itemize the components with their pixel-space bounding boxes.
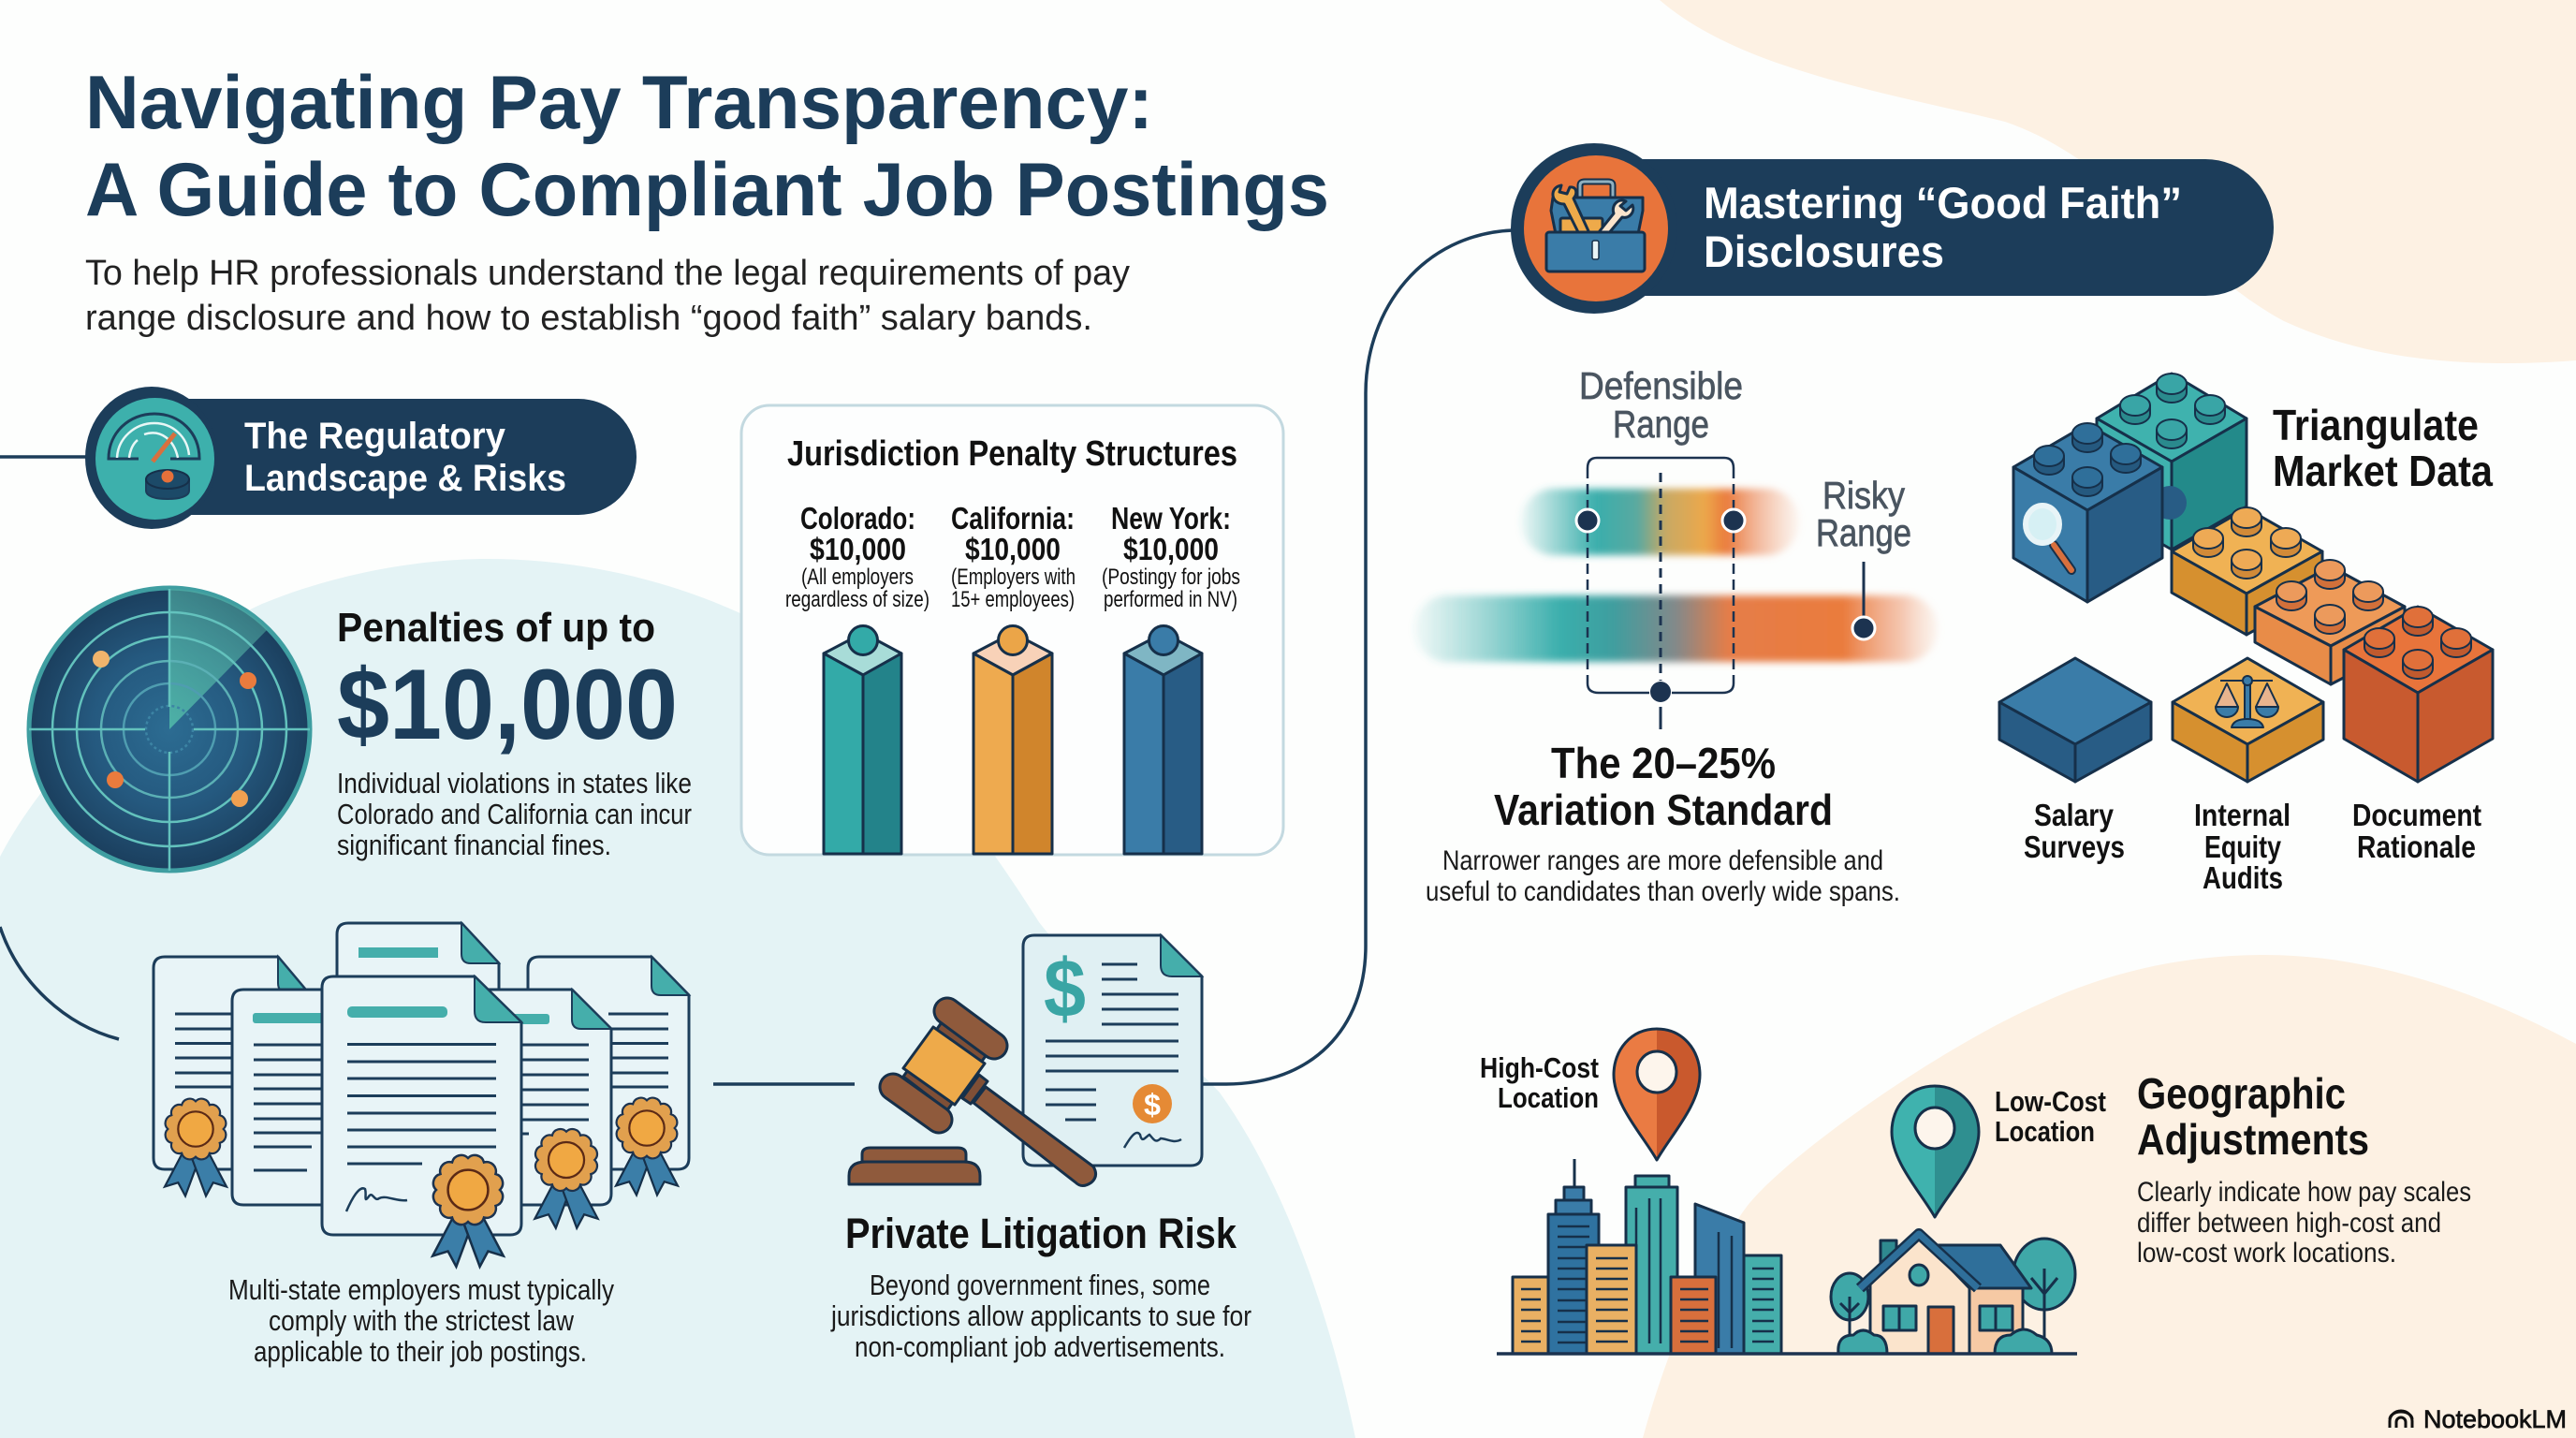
background blob: teal [0, 559, 1355, 1438]
text block: variation standard: Narrower ranges are more defensible and [1442, 845, 1883, 876]
column: Colorado [785, 501, 929, 612]
ground line [1497, 1352, 2077, 1356]
bar: New York [1124, 625, 1202, 854]
illustration: fined document: $ [1044, 942, 1086, 1034]
subtitle: To help HR professionals understand the legal requirements of pay [85, 254, 1130, 293]
middle left document [232, 990, 393, 1205]
middle right document [440, 990, 611, 1205]
title: Navigating Pay Transparency: [85, 61, 1153, 145]
icon: magnifier [2054, 545, 2071, 570]
top document [337, 923, 499, 1030]
stat: penalties of up to $10,000: Penalties of up to [337, 605, 655, 651]
illustration: fined document: $ [1144, 1088, 1161, 1122]
icon: gauge [109, 414, 199, 499]
caption: multi-state employers: Multi-state employers must typically [228, 1273, 614, 1306]
icon: scales [2216, 676, 2278, 727]
heading: triangulate market data [2273, 401, 2493, 495]
section header: good faith: Mastering “Good Faith” [1704, 178, 2182, 227]
illustration: building blocks [1999, 374, 2493, 782]
flat block: blue [1999, 658, 2151, 782]
tree: right [2013, 1239, 2075, 1348]
column: New York: $10,000 [1123, 532, 1219, 566]
subtitle: range disclosure and how to establish “good faith” salary bands. [85, 299, 1092, 338]
block: blue with magnifier [2013, 423, 2187, 602]
flat block: gold with scales [2173, 658, 2323, 782]
block: gold [2172, 507, 2322, 635]
text block: variation standard: The 20–25% [1551, 739, 1776, 787]
stat: penalties of up to $10,000: Individual violations in states like [337, 767, 692, 800]
back right document [528, 957, 689, 1169]
icon: toolbox [1546, 182, 1645, 271]
column: New York [1102, 501, 1240, 612]
front document [322, 976, 521, 1235]
section header: regulatory landscape: The Regulatory [244, 416, 506, 457]
block: red orange [2344, 607, 2493, 782]
label: risky range: Risky [1822, 474, 1905, 517]
section header: good faith: Disclosures [1704, 227, 1944, 276]
text block: variation standard: Variation Standard [1494, 785, 1833, 834]
text block: geographic adjustments: differ between high-cost and [2137, 1208, 2441, 1239]
text block: private litigation risk [830, 1210, 1251, 1363]
back left document [154, 957, 308, 1169]
text block: geographic adjustments: Adjustments [2137, 1115, 2369, 1164]
bar: California [973, 625, 1052, 854]
icon: radar [29, 588, 310, 871]
illustration: city [1513, 1159, 1781, 1354]
label: risky range [1816, 474, 1911, 554]
radar sweep [169, 589, 268, 729]
label: risky range: Range [1816, 511, 1911, 554]
seal: back left [165, 1099, 227, 1196]
column: Colorado: (All employers [801, 565, 914, 590]
section header: good faith [1511, 143, 2274, 314]
caption: multi-state employers: comply with the strictest law [269, 1304, 575, 1337]
text block: private litigation risk: Private Litigation Risk [845, 1210, 1237, 1257]
label: high-cost location [1480, 1051, 1599, 1114]
column: California [951, 501, 1076, 612]
section header: regulatory landscape [85, 387, 637, 529]
label: document rationale: Document [2352, 798, 2481, 832]
label: salary surveys: Surveys [2024, 829, 2125, 864]
heading: triangulate market data: Triangulate [2273, 401, 2479, 449]
title: A Guide to Compliant Job Postings [85, 148, 1329, 232]
stat: penalties of up to $10,000: Colorado and California can incur [337, 798, 692, 830]
section header: regulatory landscape: Landscape & Risks [244, 458, 566, 499]
wide range bar [1414, 595, 1938, 662]
column: Colorado: Colorado: [800, 501, 915, 536]
seal: back right [616, 1098, 678, 1195]
text block: geographic adjustments: low-cost work locations. [2137, 1238, 2396, 1269]
icon: orange location pin [1614, 1029, 1700, 1160]
stat: penalties of up to $10,000: $10,000 [337, 648, 678, 760]
gavel base [862, 1148, 966, 1162]
block: light orange [2255, 560, 2405, 684]
label: defensible range: Defensible [1579, 364, 1743, 407]
bar: Colorado [824, 625, 901, 854]
subtitle [85, 254, 1130, 338]
text block: variation standard: useful to candidates than overly wide spans. [1426, 876, 1900, 907]
stat: penalties of up to $10,000 [337, 605, 692, 861]
column: California: California: [951, 501, 1075, 536]
label: low-cost location [1995, 1085, 2106, 1148]
gavel head [903, 1022, 988, 1110]
text block: geographic adjustments: Geographic [2137, 1069, 2346, 1118]
label: salary surveys: Salary [2034, 798, 2115, 832]
text block: private litigation risk: non-compliant job advertisements. [855, 1330, 1225, 1363]
column: California: $10,000 [965, 532, 1061, 566]
column: New York: New York: [1111, 501, 1231, 536]
connector lines [0, 230, 1513, 1084]
column: California: (Employers with [951, 565, 1076, 590]
title [85, 61, 1329, 232]
caption: multi-state employers [228, 1273, 614, 1368]
label: internal equity audits [2194, 798, 2291, 895]
narrow range bar [1521, 489, 1799, 555]
background blob: peach top right [1660, 0, 2576, 363]
illustration: fined document [1023, 935, 1202, 1166]
text block: geographic adjustments [2137, 1069, 2471, 1269]
text block: private litigation risk: jurisdictions allow applicants to sue for [830, 1299, 1251, 1332]
footer: NotebookLM mark: NotebookLM [2423, 1405, 2567, 1433]
block: teal [2097, 374, 2247, 550]
panel: jurisdiction penalty structures [741, 405, 1283, 855]
text block: variation standard [1426, 739, 1900, 907]
label: low-cost location: Low-Cost [1995, 1085, 2106, 1118]
tree: left [1831, 1273, 1868, 1348]
heading: triangulate market data: Market Data [2273, 447, 2493, 495]
column: Colorado: regardless of size) [785, 587, 929, 612]
column: New York: performed in NV) [1104, 587, 1237, 612]
icon: teal location pin [1892, 1086, 1979, 1217]
caption: multi-state employers: applicable to their job postings. [254, 1335, 587, 1368]
label: document rationale [2352, 798, 2481, 864]
illustration: house [1831, 1234, 2075, 1354]
label: document rationale: Rationale [2357, 829, 2476, 864]
text block: geographic adjustments: Clearly indicate how pay scales [2137, 1177, 2471, 1208]
label: low-cost location: Location [1995, 1115, 2095, 1148]
label: defensible range [1579, 364, 1743, 446]
column: California: 15+ employees) [951, 587, 1075, 612]
stat: penalties of up to $10,000: significant financial fines. [337, 829, 611, 861]
chart: defensible vs risky range [1414, 364, 1938, 729]
text block: private litigation risk: Beyond government fines, some [870, 1269, 1210, 1301]
label: internal equity audits: Internal [2194, 798, 2291, 832]
illustration: stacked compliance documents [154, 923, 689, 1267]
label: salary surveys [2024, 798, 2125, 864]
seal: middle right [534, 1129, 598, 1228]
label: internal equity audits: Audits [2203, 860, 2283, 895]
column: New York: (Postingy for jobs [1102, 565, 1240, 590]
label: defensible range: Range [1613, 403, 1709, 446]
label: high-cost location: High-Cost [1480, 1051, 1599, 1084]
label: internal equity audits: Equity [2204, 829, 2282, 864]
gavel handle [973, 1087, 1096, 1185]
panel heading: Jurisdiction Penalty Structures [787, 434, 1237, 474]
icon: gavel [849, 1011, 1096, 1185]
label: high-cost location: Location [1498, 1081, 1599, 1114]
column: Colorado: $10,000 [810, 532, 906, 566]
seal: front [432, 1155, 504, 1267]
background blob: peach bottom right [1643, 955, 2576, 1438]
